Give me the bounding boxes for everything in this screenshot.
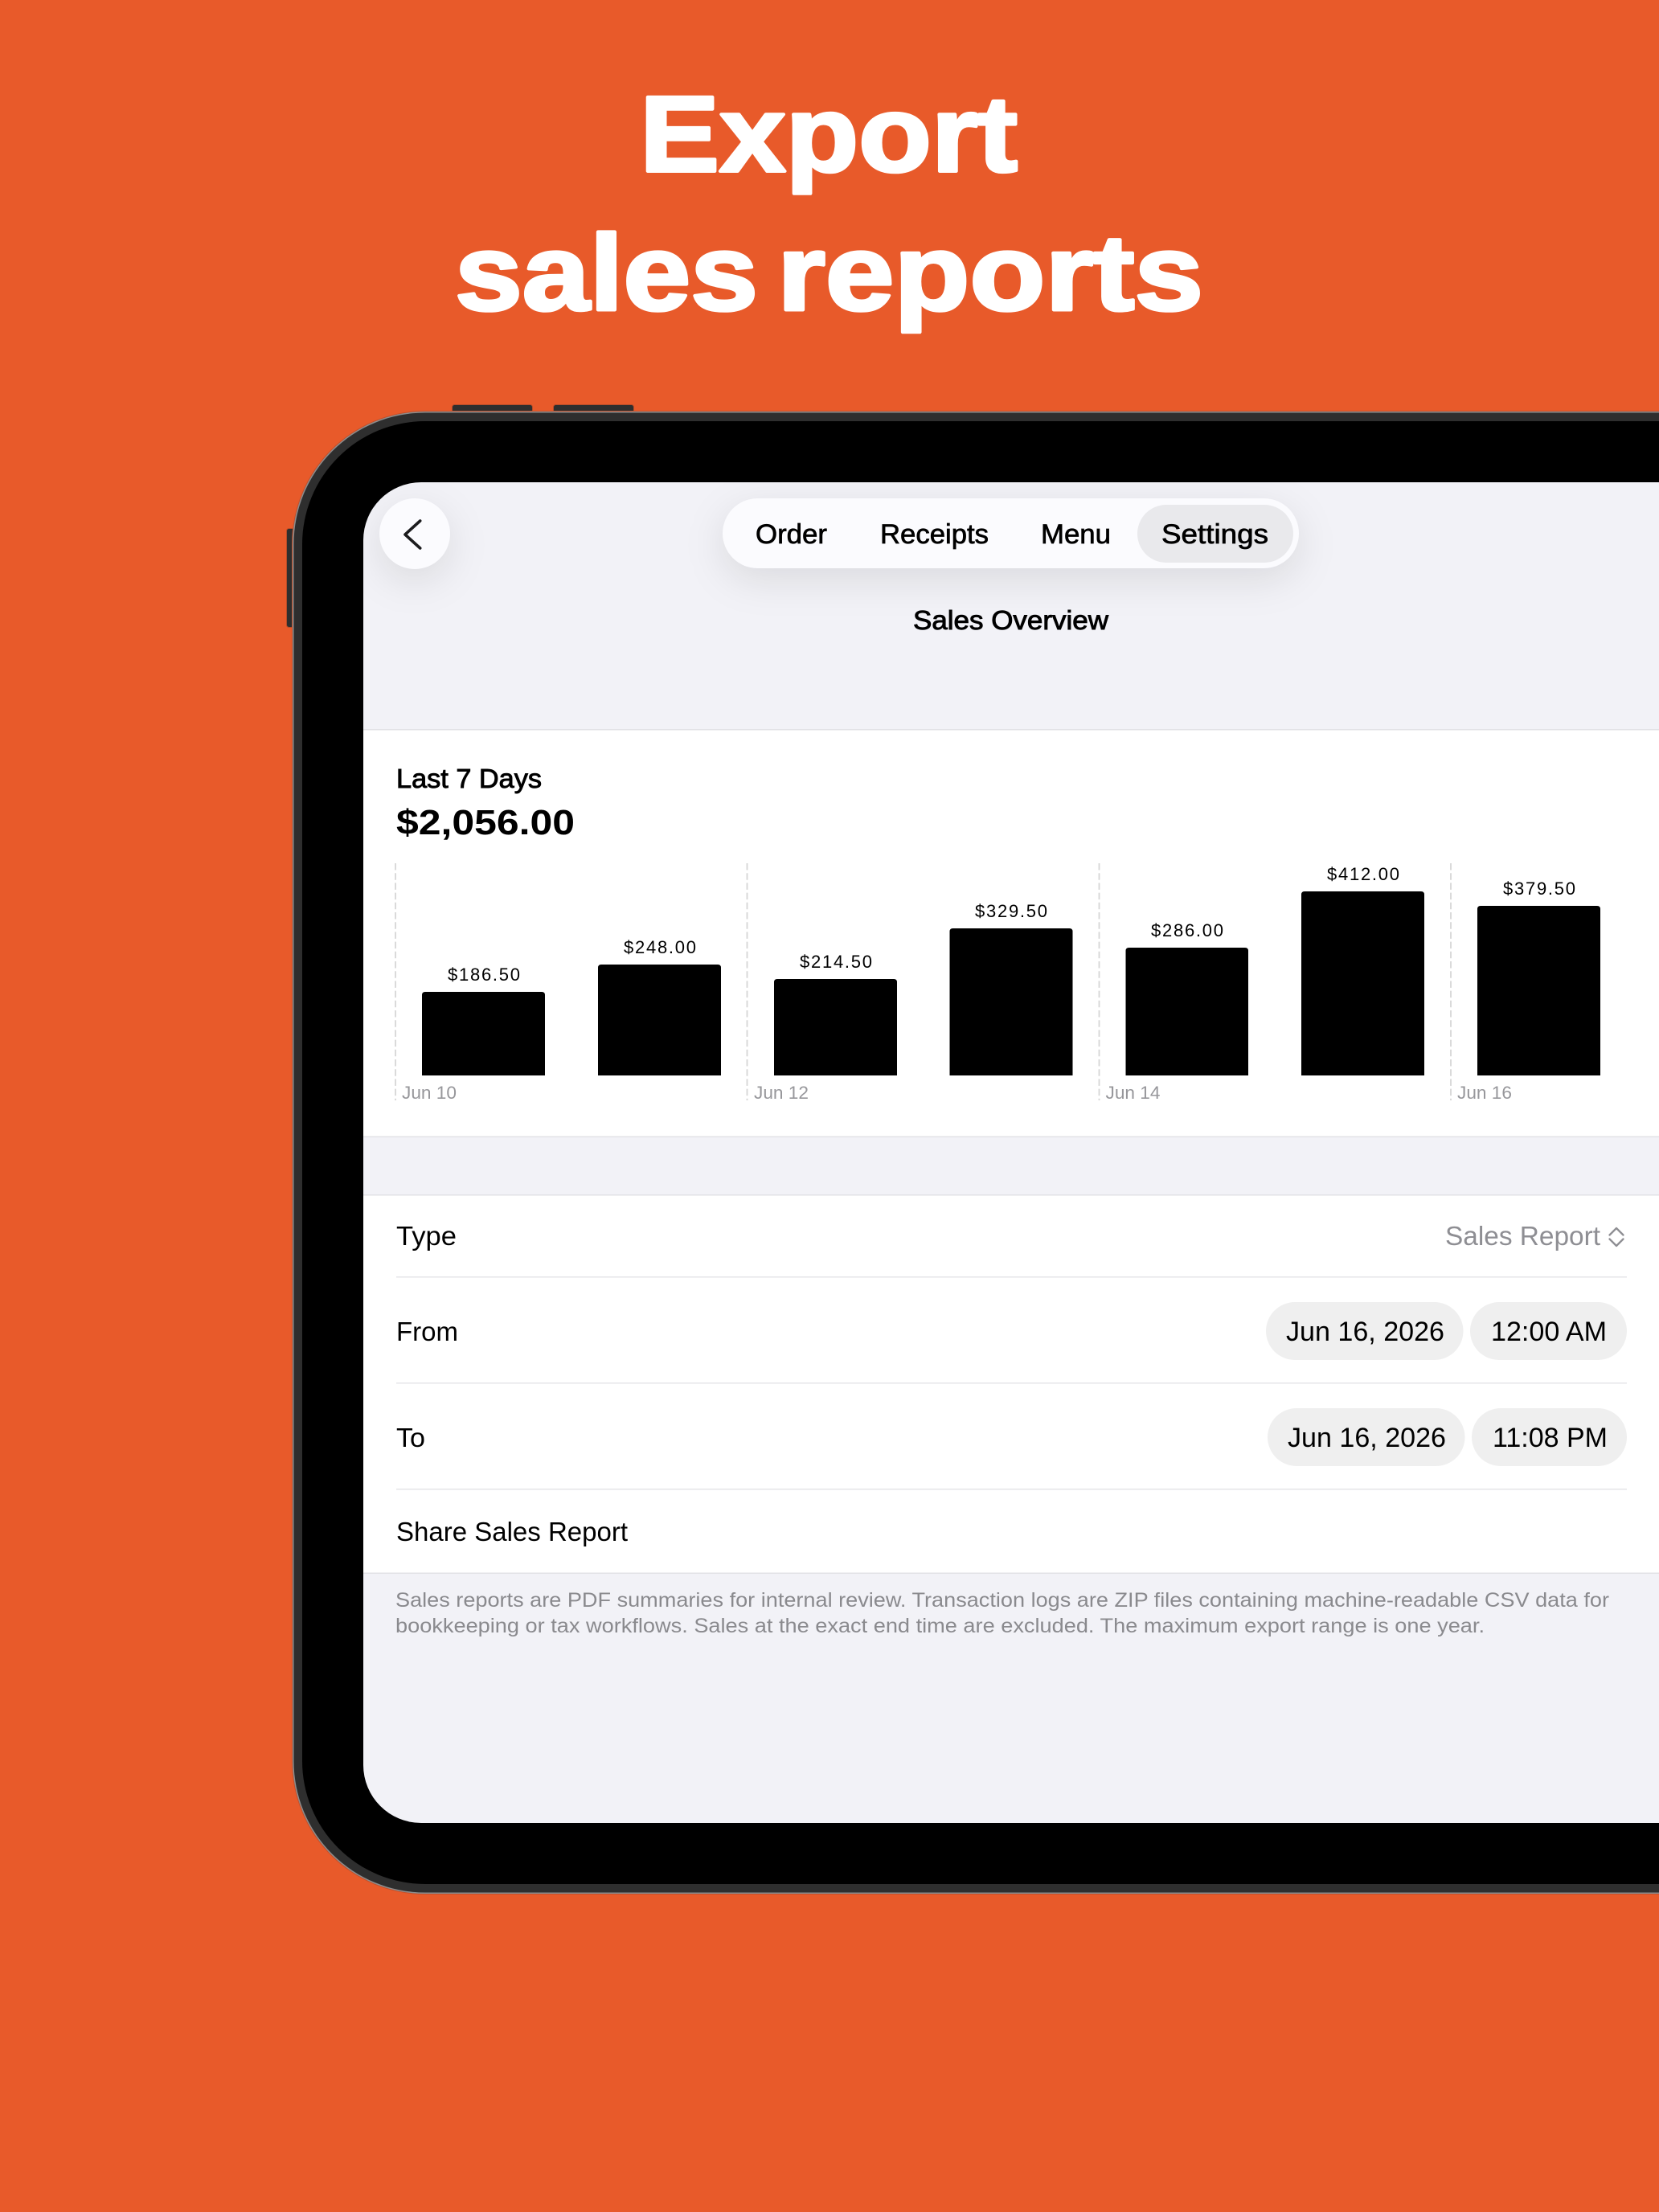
tab labels: Receipts	[880, 519, 989, 550]
date gridlines	[395, 863, 1451, 1100]
row: type	[397, 1226, 1624, 1251]
panel: sales chart	[363, 729, 1659, 1137]
date axis labels: Jun 16	[1457, 1083, 1512, 1103]
bars	[422, 891, 1600, 1075]
title: reports	[777, 214, 1203, 333]
row: from: 12:00 AM	[1491, 1317, 1607, 1347]
infographic canvas	[286, 95, 1659, 1895]
date axis labels: Jun 10	[402, 1083, 457, 1103]
panel: export form	[363, 1194, 1659, 1574]
chart total: $2,056.00	[396, 803, 575, 842]
row: from	[396, 1302, 1627, 1360]
tab labels: Menu	[1041, 519, 1111, 550]
navigation shadows	[376, 527, 1302, 588]
date axis labels: Jun 14	[1106, 1083, 1161, 1103]
app screen	[363, 482, 1659, 1823]
bar value labels: $412.00	[1327, 864, 1399, 884]
row: from: Jun 16, 2026	[1286, 1317, 1444, 1347]
tablet device	[286, 405, 1659, 1895]
row: type: Sales Report	[1445, 1221, 1600, 1251]
tab labels	[756, 522, 1268, 550]
bar value labels: $248.00	[624, 937, 696, 957]
bar chart	[395, 863, 1600, 1103]
device frame	[292, 411, 1659, 1895]
bar value labels: $186.50	[448, 965, 520, 985]
footnote: Sales reports are PDF summaries for internal review. Transaction logs are ZIP files containing machine-readable CSV data for	[395, 1589, 1609, 1612]
row: to: To	[396, 1423, 425, 1452]
icon: back chevron	[405, 521, 420, 548]
icon: up-down chevrons	[1609, 1228, 1624, 1246]
row: to: Jun 16, 2026	[1288, 1423, 1446, 1453]
back button	[379, 498, 450, 569]
selected tab highlight	[1137, 505, 1293, 563]
date axis labels: Jun 12	[754, 1083, 809, 1103]
bar value labels: $329.50	[975, 901, 1047, 921]
title: Export	[640, 75, 1018, 195]
row: to: 11:08 PM	[1493, 1423, 1608, 1453]
title: sales	[455, 214, 758, 333]
row: type: Type	[396, 1221, 457, 1251]
chart period label: Last 7 Days	[396, 764, 542, 793]
screen heading: Sales Overview	[913, 605, 1108, 635]
tab labels: Order	[756, 519, 827, 550]
bar value labels: $286.00	[1151, 920, 1223, 940]
tab labels: Settings	[1161, 519, 1268, 550]
row: share action: Share Sales Report	[396, 1517, 628, 1546]
title	[455, 75, 1203, 333]
footnote: bookkeeping or tax workflows. Sales at the exact end time are excluded. The maximum export range is one year.	[395, 1615, 1485, 1637]
bar value labels	[448, 864, 1575, 985]
row: from: From	[396, 1317, 458, 1346]
row: to	[396, 1408, 1627, 1466]
bar value labels: $379.50	[1503, 879, 1575, 899]
tab bar	[723, 498, 1299, 568]
date axis labels	[402, 1087, 1511, 1099]
hardware buttons	[286, 405, 633, 627]
bar value labels: $214.50	[800, 952, 872, 972]
footnote	[395, 1589, 1609, 1637]
